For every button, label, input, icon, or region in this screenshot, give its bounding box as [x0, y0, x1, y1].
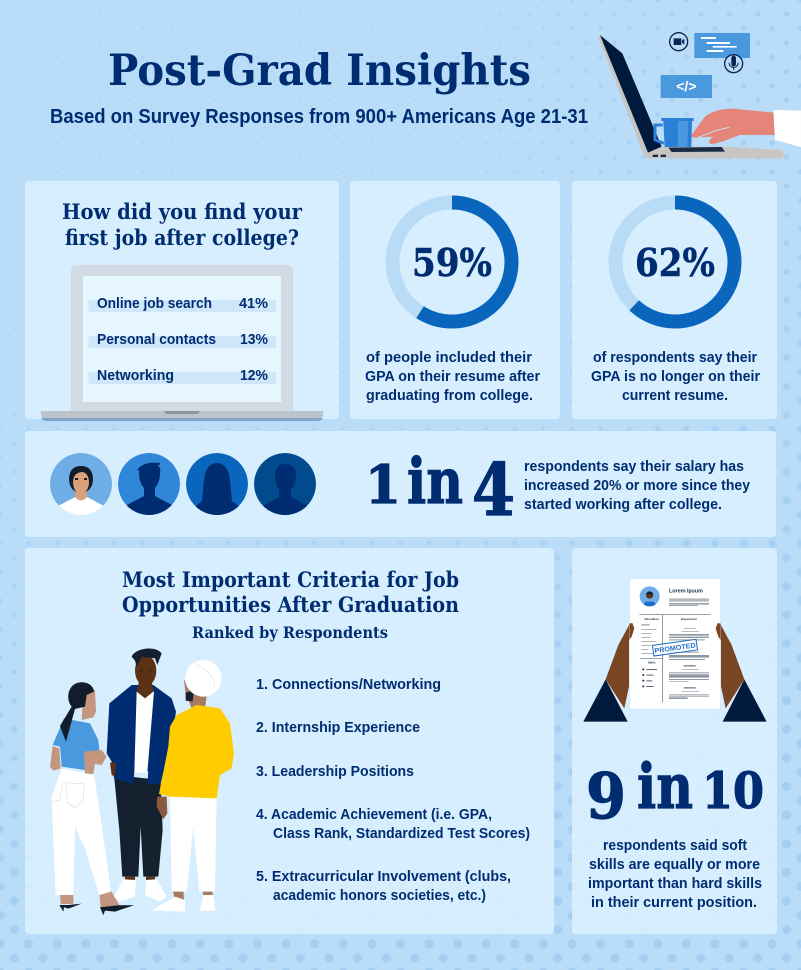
illustration: hands holding a resume: Education — [644, 617, 659, 621]
text: soft skills: in their current position. — [591, 894, 757, 911]
text: GPA on resume: GPA on their resume after — [365, 368, 540, 385]
subtitle: Based on Survey Responses from 900+ Americans Age 21-31 — [50, 106, 588, 128]
heading: first job — [62, 199, 303, 250]
text: GPA on resume: graduating from college. — [366, 387, 533, 404]
stat: 1 in 4 — [365, 444, 515, 532]
illustration: three graduates talking — [50, 649, 234, 915]
row: online job search: 41% — [239, 295, 268, 312]
list: ranked criteria: 4. Academic Achievement (i.e. GPA, — [256, 806, 492, 823]
donut chart: 59% — [392, 202, 512, 322]
illustration: hands holding a resume: PROMOTED — [654, 642, 696, 655]
icon: silhouette woman with long hair — [186, 453, 248, 516]
text: GPA no longer: GPA is no longer on their — [591, 368, 760, 385]
text: soft skills: important than hard skills — [588, 875, 762, 892]
panel: 59% included GPA — [350, 181, 560, 419]
panel: most important criteria — [25, 548, 554, 934]
list: ranked criteria: Class Rank, Standardized Test Scores) — [273, 825, 530, 842]
illustration: hands holding a resume: Lorem Ipsum — [669, 588, 703, 594]
illustration: laptop with hand and coffee mug: </> — [676, 78, 696, 94]
list: ranked criteria: 2. Internship Experience — [256, 719, 420, 736]
row: personal contacts: 13% — [240, 331, 268, 348]
icon: woman avatar — [50, 453, 112, 516]
heading: criteria: Most Important Criteria for Job — [122, 567, 459, 592]
text: salary increase: started working after college. — [524, 496, 722, 513]
stat: 9 in 10 — [586, 750, 764, 833]
row: networking: 12% — [240, 367, 268, 384]
stat: 9 in 10: 9 — [586, 759, 626, 833]
text: GPA on resume: of people included their — [366, 349, 532, 366]
illustration: hands holding a resume: Skills — [648, 661, 656, 665]
stat: 1 in 4: 4 — [472, 447, 515, 532]
figure: woman in blue top — [50, 682, 134, 915]
stat: 1 in 4: 1 — [365, 455, 401, 516]
icon: laptop — [41, 265, 323, 421]
text: salary increase: increased 20% or more since they — [524, 477, 751, 494]
text: salary increase: respondents say their salary has — [524, 458, 744, 475]
icon: silhouette man — [254, 453, 316, 516]
donut chart: 59%: 59% — [412, 240, 492, 285]
heading: criteria: Opportunities After Graduation — [122, 592, 459, 617]
donut chart: 62%: 62% — [635, 240, 715, 285]
text: salary increase — [524, 458, 751, 513]
row: personal contacts — [88, 331, 276, 348]
panel: 62% removed GPA — [572, 181, 777, 419]
row: online job search — [88, 295, 276, 312]
illustration: hands holding a resume: Experience — [681, 617, 697, 621]
panel: 9 in 10 soft skills — [572, 548, 777, 934]
panel: 1 in 4 salary — [25, 431, 776, 537]
text: soft skills — [588, 837, 762, 911]
heading: first job: first job after college? — [65, 225, 299, 250]
illustration: hands holding a resume — [583, 578, 767, 722]
list: ranked criteria: 1. Connections/Networking — [256, 676, 441, 693]
stat: 9 in 10: 10 — [702, 761, 764, 820]
list: ranked criteria: 3. Leadership Positions — [256, 763, 414, 780]
figure: man in denim jacket — [107, 649, 176, 902]
text: soft skills: skills are equally or more — [589, 856, 760, 873]
row: online job search: Online job search — [97, 295, 212, 312]
heading: first job: How did you find your — [62, 199, 303, 224]
text: GPA no longer: current resume. — [622, 387, 728, 404]
heading: criteria — [122, 567, 459, 642]
text: GPA no longer: of respondents say their — [593, 349, 757, 366]
text: GPA no longer — [591, 349, 760, 404]
row: networking: Networking — [97, 367, 174, 384]
text: GPA on resume — [365, 349, 540, 404]
icon: silhouette man with tousled hair — [118, 453, 180, 516]
list: ranked criteria: 5. Extracurricular Involvement (clubs, — [256, 868, 511, 885]
list: ranked criteria — [256, 676, 530, 904]
row: networking — [88, 367, 276, 384]
heading: criteria: Ranked by Respondents — [192, 623, 388, 642]
stat: 9 in 10: in — [637, 750, 693, 823]
list: ranked criteria: academic honors societies, etc.) — [273, 887, 486, 904]
stat: 1 in 4: in — [407, 444, 463, 518]
illustration: laptop with hand and coffee mug — [598, 33, 801, 158]
donut chart: 62% — [616, 202, 734, 322]
panel: first job — [25, 181, 339, 421]
row: personal contacts: Personal contacts — [97, 331, 216, 348]
title: Post-Grad Insights — [108, 46, 531, 96]
text: soft skills: respondents said soft — [603, 837, 747, 854]
figure: man in yellow sweater and white turban — [151, 660, 234, 912]
